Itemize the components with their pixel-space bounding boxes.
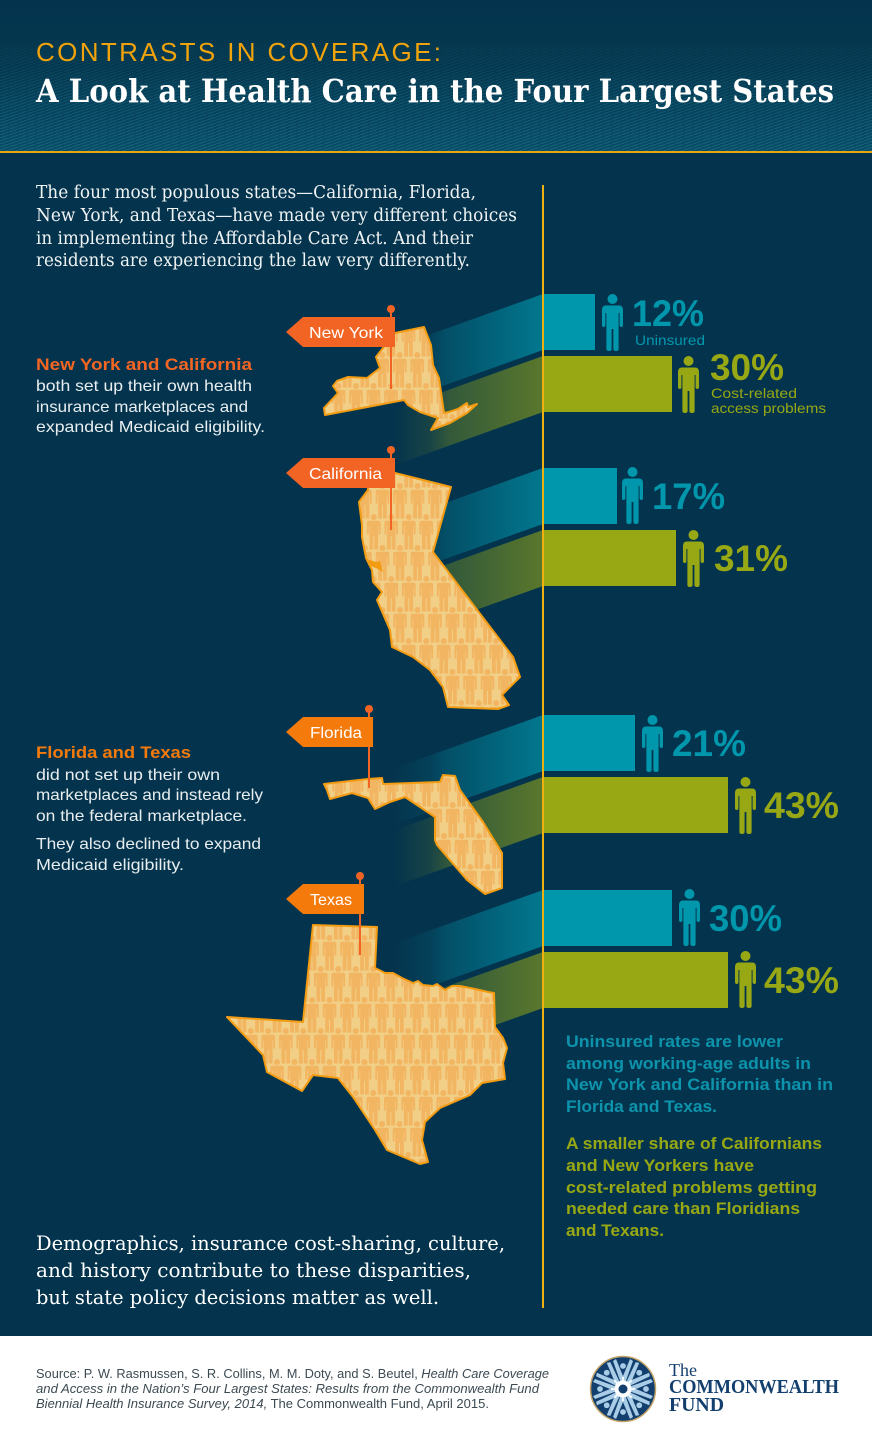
map: Texas <box>227 925 507 1164</box>
finding: cost-related problems <box>566 1134 822 1240</box>
source citation: and Access in the Nation’s Four Largest States: Results from the Commonwealth Fund <box>36 1382 540 1396</box>
header band <box>0 45 872 153</box>
text: Florida and Texas <box>36 743 263 874</box>
logo: Commonwealth Fund emblem <box>590 1356 656 1422</box>
map: California <box>359 473 520 709</box>
flag: New York <box>286 305 395 389</box>
map: Florida <box>324 775 502 894</box>
stats: California: 31% <box>714 538 788 579</box>
text: Florida and Texas: marketplaces and instead rely <box>36 787 263 804</box>
text: Florida and Texas: on the federal marketplace. <box>36 808 247 825</box>
text: Florida and Texas: Florida and Texas <box>36 743 191 762</box>
finding: cost-related problems: cost-related problems getting <box>566 1178 817 1197</box>
stats: Texas: 43% <box>764 960 839 1001</box>
finding: cost-related problems: A smaller share of Californians <box>566 1134 822 1153</box>
flag: Florida <box>286 705 373 788</box>
finding: uninsured rates <box>566 1032 833 1116</box>
map: New York <box>324 327 477 430</box>
conclusion text: but state policy decisions matter as well. <box>36 1285 439 1309</box>
finding: cost-related problems: and New Yorkers have <box>566 1156 754 1175</box>
stats: California <box>544 467 788 587</box>
text: New York and California: insurance marketplaces and <box>36 399 248 416</box>
intro text: New York, and Texas—have made very different choices <box>36 206 517 226</box>
text: Florida and Texas: They also declined to expand <box>36 836 261 853</box>
logo: Commonwealth Fund wordmark: The <box>669 1360 697 1380</box>
text: New York and California: New York and California <box>36 355 253 374</box>
finding: cost-related problems: needed care than Floridians <box>566 1199 800 1218</box>
stats: Florida <box>544 715 839 834</box>
flag: Texas: Texas <box>310 892 352 909</box>
text: New York and California: expanded Medicaid eligibility. <box>36 419 265 436</box>
vertical divider line <box>542 185 544 1308</box>
stats: California: 17% <box>652 476 725 517</box>
logo: Commonwealth Fund wordmark: COMMONWEALTH <box>669 1376 839 1398</box>
title: CONTRASTS IN COVERAGE: <box>36 37 441 67</box>
footer panel <box>0 1336 872 1444</box>
conclusion text <box>36 1231 505 1309</box>
text: New York and California <box>36 355 265 436</box>
text: Florida and Texas: did not set up their own <box>36 767 220 784</box>
finding: uninsured rates: Uninsured rates are lower <box>566 1032 783 1051</box>
finding: uninsured rates: among working-age adults in <box>566 1054 811 1073</box>
flag: New York: New York <box>309 325 384 342</box>
stats: New York: 30% <box>710 347 784 388</box>
stats: Florida: 21% <box>672 723 746 764</box>
stats: New York: Cost-related <box>711 385 797 401</box>
flag: California <box>286 446 395 530</box>
finding: cost-related problems: and Texans. <box>566 1221 664 1240</box>
stats: Florida: 43% <box>764 785 839 826</box>
intro text <box>36 183 517 271</box>
logo: Commonwealth Fund wordmark: FUND <box>669 1394 724 1416</box>
intro text: The four most populous states—California, Florida, <box>36 183 476 203</box>
intro text: in implementing the Affordable Care Act. And their <box>36 229 474 249</box>
stats: New York: 12% <box>632 293 704 334</box>
conclusion text: Demographics, insurance cost-sharing, culture, <box>36 1231 505 1255</box>
flag: Texas <box>286 872 364 955</box>
beams <box>395 294 543 1061</box>
source citation: Source: P. W. Rasmussen, S. R. Collins, M. M. Doty, and S. Beutel, Health Care Coverage <box>36 1367 549 1381</box>
title <box>35 37 834 110</box>
flag: California: California <box>309 466 382 483</box>
conclusion text: and history contribute to these disparities, <box>36 1258 471 1282</box>
source citation: Biennial Health Insurance Survey, 2014, The Commonwealth Fund, April 2015. <box>36 1397 489 1411</box>
stats: Texas: 30% <box>709 898 782 939</box>
intro text: residents are experiencing the law very differently. <box>36 251 470 271</box>
stats: New York <box>544 293 826 416</box>
finding: uninsured rates: New York and California than in <box>566 1075 833 1094</box>
logo: Commonwealth Fund wordmark <box>669 1360 839 1416</box>
source citation <box>36 1367 549 1411</box>
stats: Texas <box>544 889 839 1008</box>
text: Florida and Texas: Medicaid eligibility. <box>36 857 184 874</box>
flag: Florida: Florida <box>310 725 362 742</box>
finding: uninsured rates: Florida and Texas. <box>566 1097 717 1116</box>
stats: New York: Uninsured <box>635 332 705 348</box>
stats: New York: access problems <box>711 400 826 416</box>
text: New York and California: both set up their own health <box>36 378 252 395</box>
